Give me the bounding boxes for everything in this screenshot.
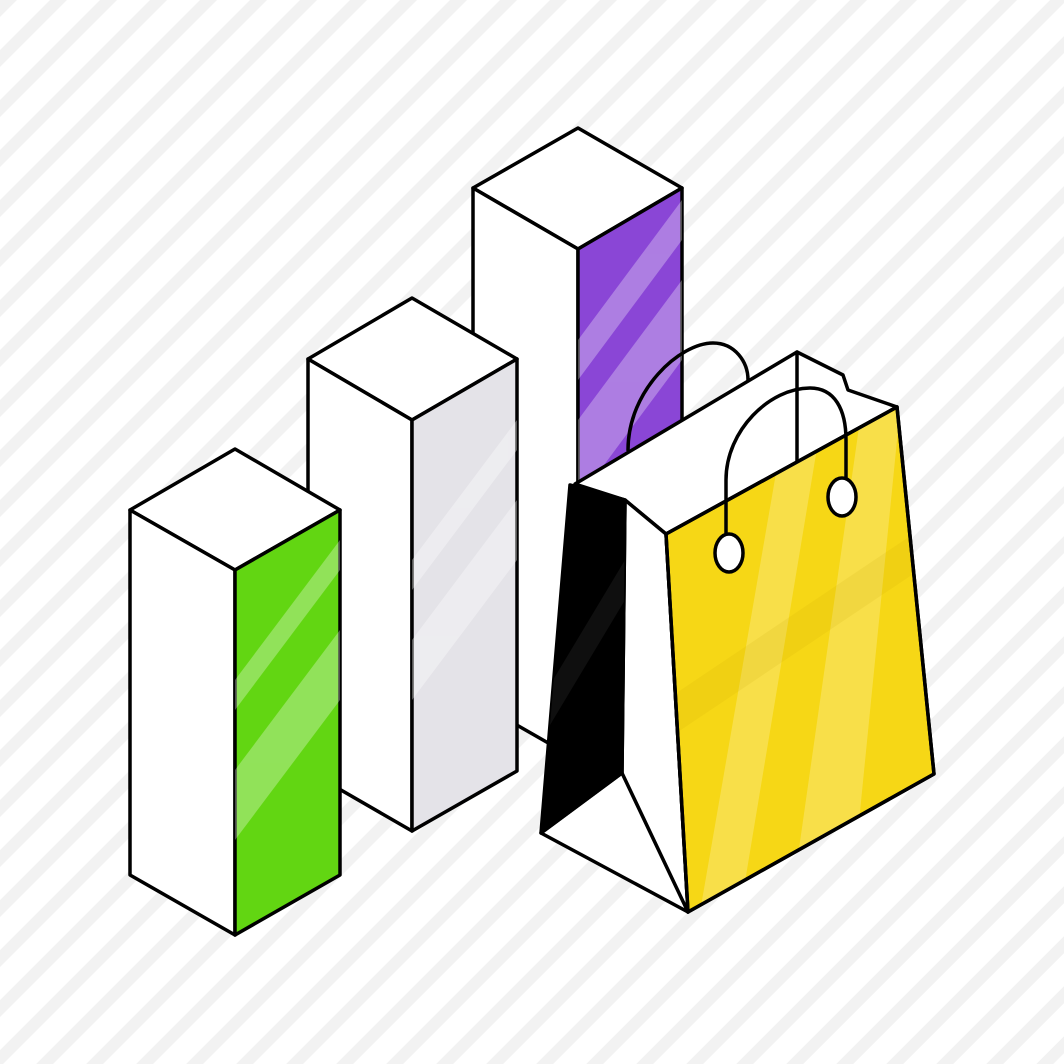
handle rings bbox=[715, 534, 743, 572]
shopping bag bbox=[541, 343, 934, 912]
bag opening bbox=[575, 352, 897, 534]
bar: green short bbox=[130, 449, 340, 935]
bag white side bbox=[541, 500, 688, 912]
bar: purple tall bbox=[473, 128, 682, 760]
bag yellow front bbox=[666, 407, 934, 912]
back handle bbox=[628, 343, 748, 450]
bar: gray middle bbox=[308, 298, 517, 831]
front handle bbox=[726, 388, 846, 533]
bag black side bbox=[541, 485, 625, 833]
